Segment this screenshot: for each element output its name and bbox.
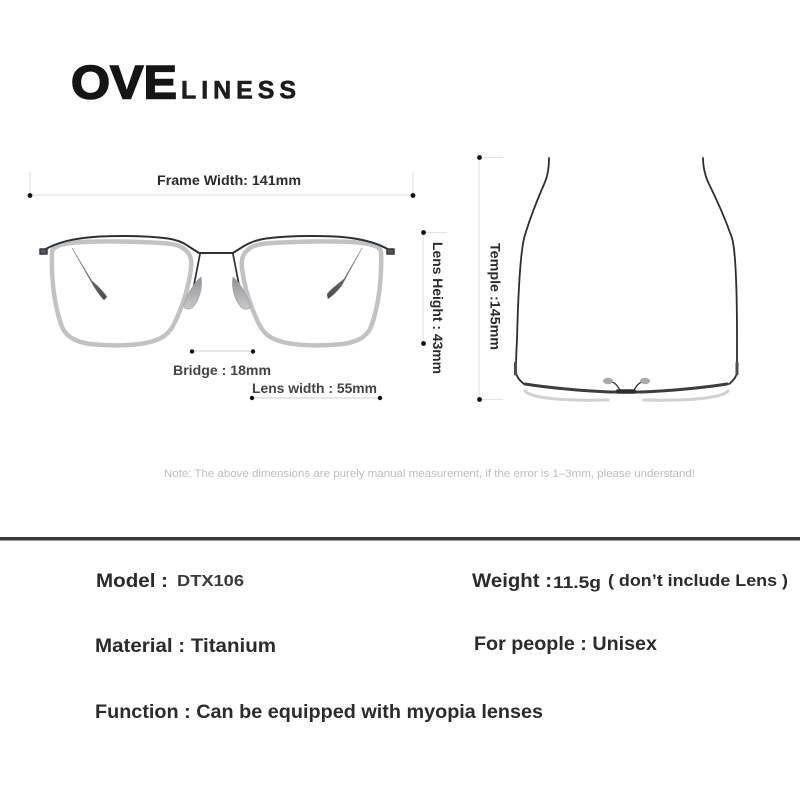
- nose pads: [184, 277, 202, 309]
- dimension: lens width: Lens width : 55mm: [252, 380, 377, 396]
- spec: model: [96, 571, 244, 592]
- spec: model: DTX106: [177, 573, 244, 590]
- dimension: lens height: [421, 230, 447, 374]
- dimension: frame width: [28, 172, 415, 198]
- spec: model: Model :: [96, 571, 168, 592]
- bridge and nose pads: [618, 389, 634, 394]
- spec: weight: [472, 571, 788, 592]
- logo: Oveliness: [71, 56, 296, 108]
- spec: for people: For people : Unisex: [474, 634, 657, 655]
- left temple: [72, 248, 107, 300]
- spec: weight: 11.5g: [553, 573, 601, 592]
- dimension: bridge: [173, 349, 271, 378]
- right temple: [327, 248, 362, 299]
- temple hinges: [516, 363, 737, 374]
- dimension: temple: Temple :145mm: [488, 243, 504, 350]
- hinges: [40, 249, 394, 254]
- logo: Oveliness: OVE: [71, 56, 177, 108]
- dimension: bridge: Bridge : 18mm: [173, 362, 271, 378]
- spec: weight: Weight :: [472, 571, 552, 592]
- front bar: [525, 384, 727, 392]
- spec: function: Function : Can be equipped with myopia lenses: [95, 702, 543, 723]
- left temple arm: [516, 158, 549, 384]
- dimension: frame width: Frame Width: 141mm: [157, 172, 301, 188]
- right lens rim: [242, 241, 381, 345]
- divider: [0, 537, 800, 540]
- front view of glasses: [40, 236, 394, 345]
- spec: material: Material : Titanium: [95, 636, 276, 657]
- top bar and bridge: [44, 236, 389, 253]
- right temple arm: [703, 158, 737, 384]
- left lens rim: [52, 241, 191, 345]
- logo: Oveliness: LINESS: [181, 76, 296, 104]
- dimension: lens height: Lens Height : 43mm: [430, 242, 446, 374]
- dimension: temple: [477, 155, 504, 402]
- top view of glasses: [516, 158, 737, 400]
- measurement note: Note: The above dimensions are purely manual measurement, if the error is 1–3mm, please understand!: [164, 468, 695, 480]
- lens edges: [525, 391, 728, 400]
- spec: weight: ( don’t include Lens ): [608, 571, 788, 590]
